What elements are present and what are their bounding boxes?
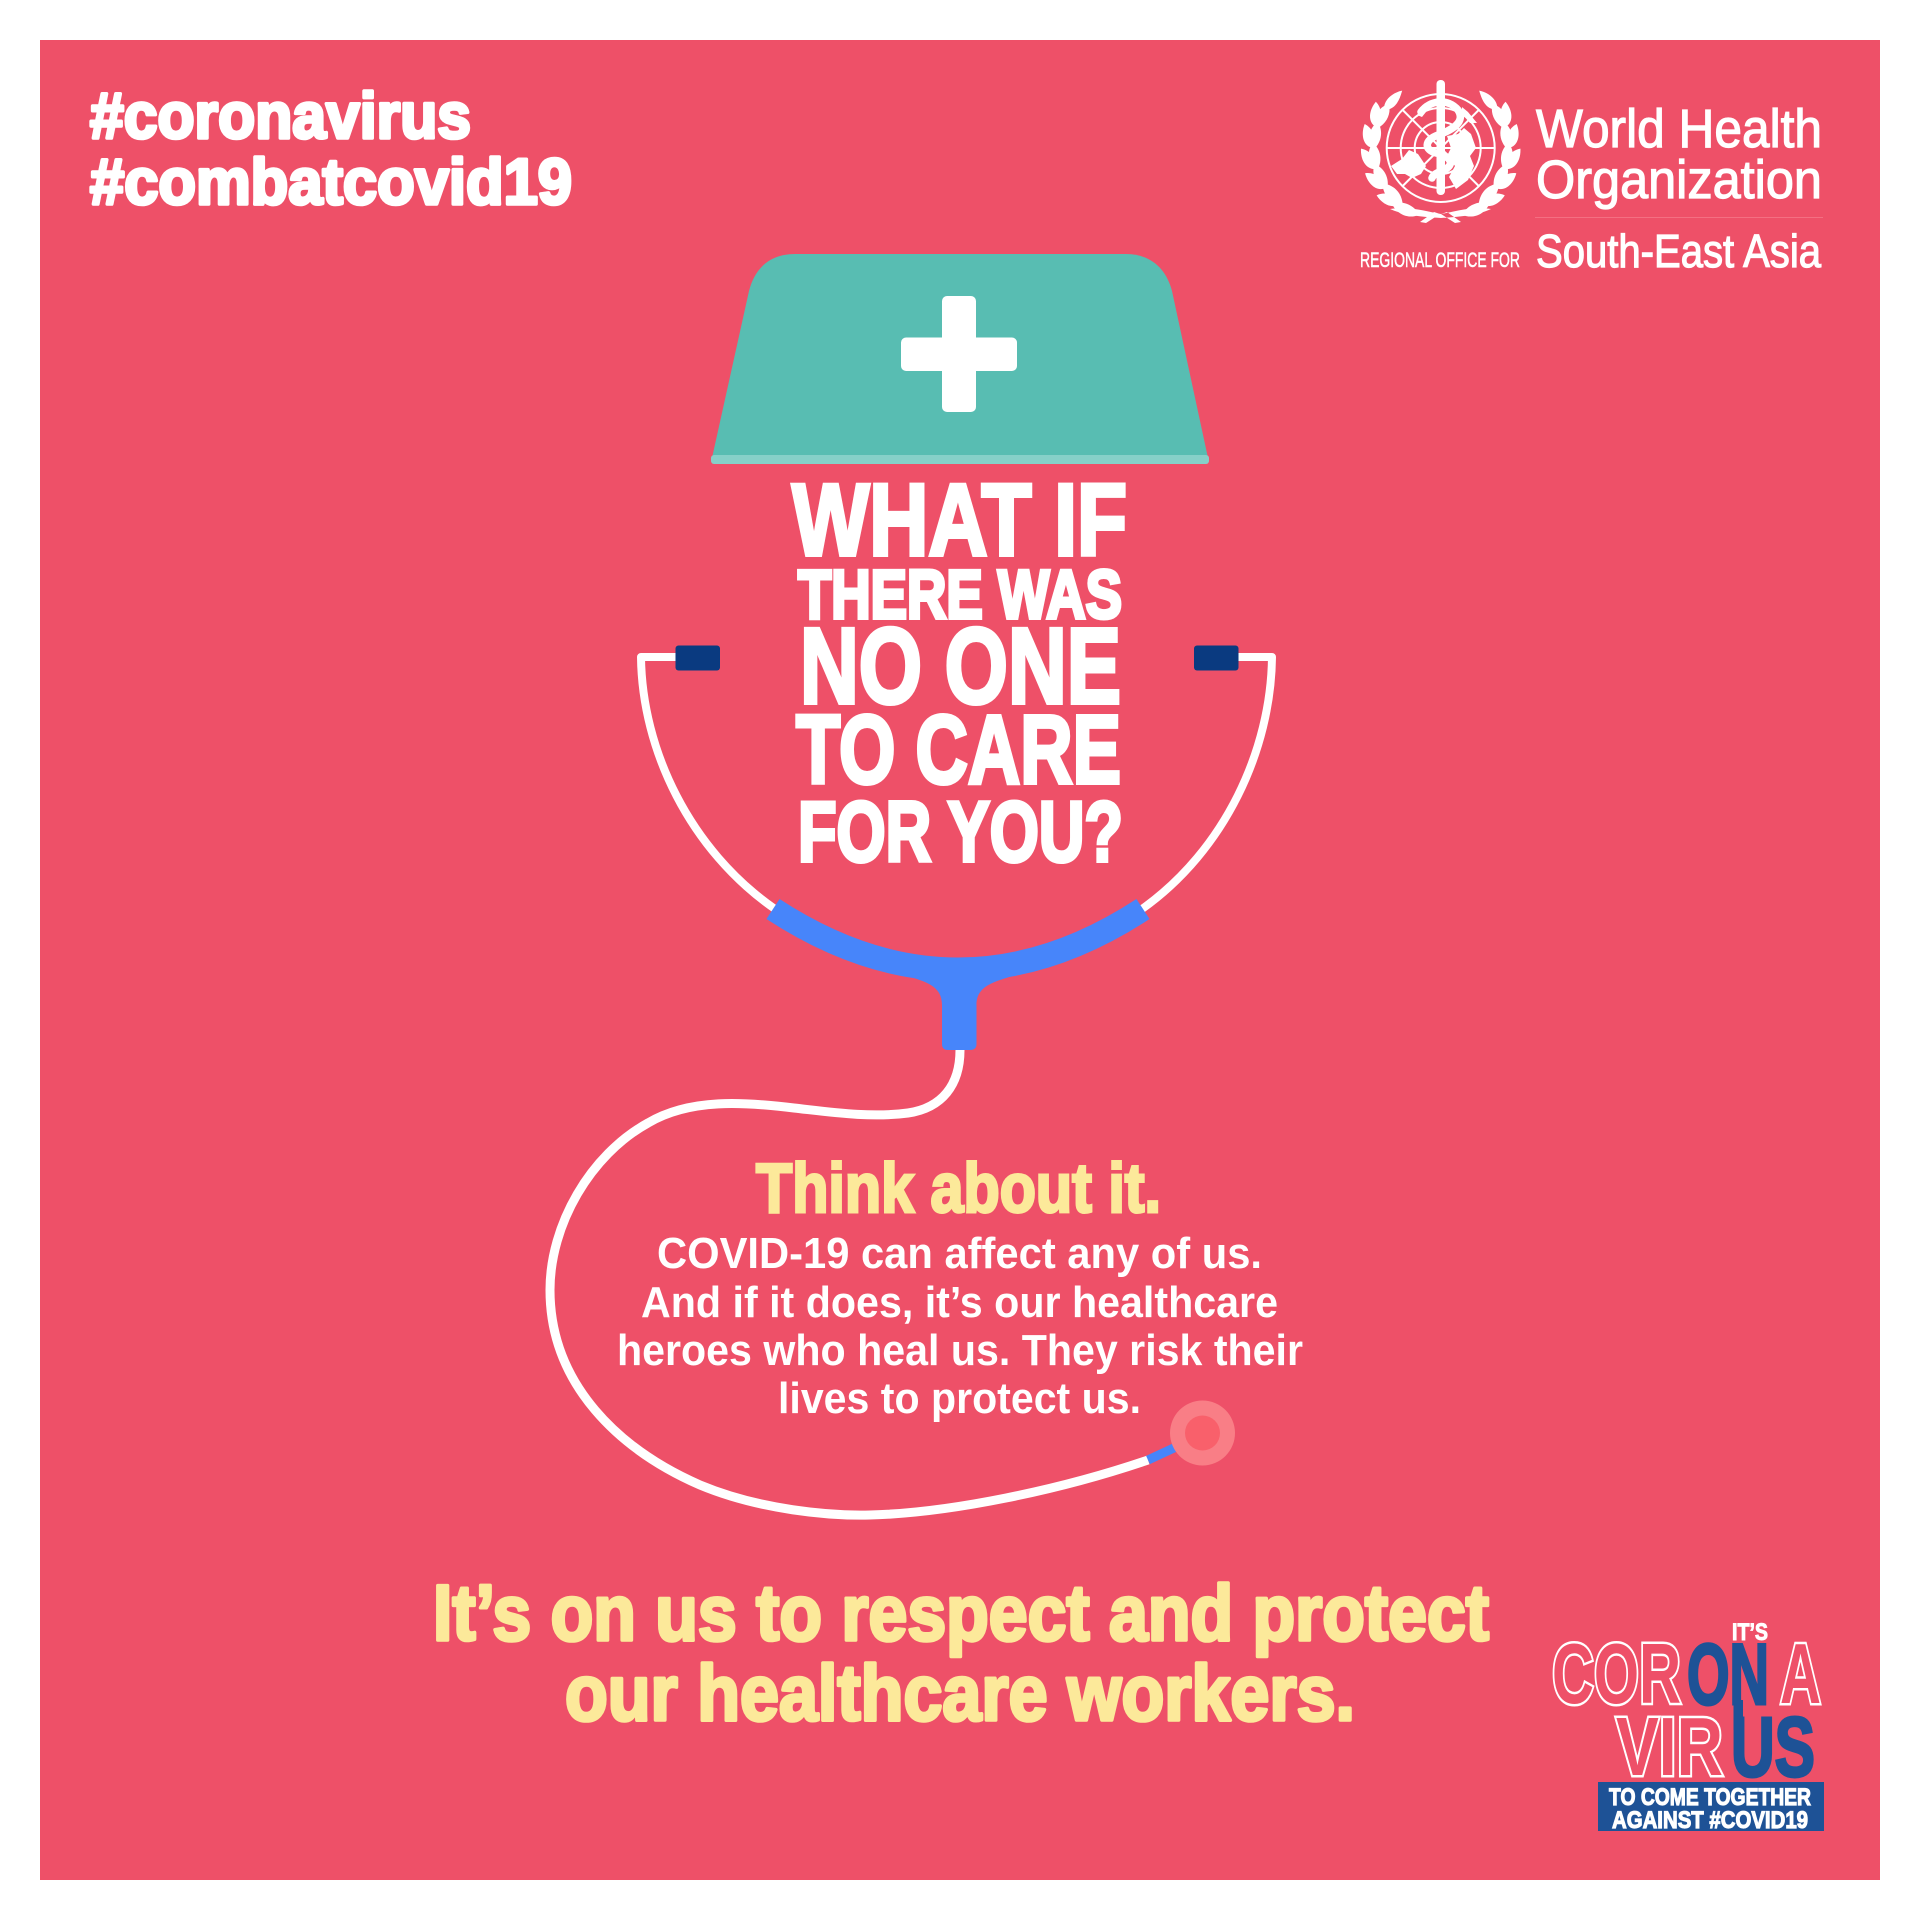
- body text: lives to protect us.: [778, 1375, 1141, 1423]
- snake and staff: [1417, 80, 1460, 195]
- hashtags: [90, 79, 572, 218]
- headline: WHAT IF: [792, 463, 1127, 577]
- body text: And if it does, it’s our healthcare: [641, 1279, 1278, 1327]
- headline: THERE WAS: [798, 556, 1122, 633]
- icon: WHO emblem: [1359, 80, 1522, 223]
- wreath left: [1359, 86, 1421, 220]
- stethoscope: [550, 646, 1272, 1515]
- body text: COVID-19 can affect any of us.: [657, 1230, 1262, 1278]
- call to action: It’s on us to respect and protect: [433, 1568, 1489, 1657]
- hashtags: #coronavirus: [90, 79, 471, 152]
- icon: nurse cap: [711, 254, 1209, 464]
- headline: NO ONE: [800, 605, 1121, 726]
- headline: FOR YOU?: [798, 785, 1123, 880]
- earpieces: [676, 646, 1238, 670]
- outlined letters: VIR: [1616, 1700, 1723, 1793]
- IT'S label: IT’S: [1732, 1619, 1768, 1646]
- body text: [617, 1230, 1303, 1423]
- wreath right: [1460, 86, 1522, 220]
- call to action: our healthcare workers.: [565, 1648, 1355, 1737]
- sub-heading: Think about it.: [756, 1149, 1161, 1227]
- tagline box: TO COME TOGETHER: [1609, 1784, 1811, 1811]
- call to action: [433, 1568, 1489, 1737]
- organization name: Organization: [1536, 150, 1822, 210]
- South-East Asia: South-East Asia: [1536, 225, 1821, 277]
- organization name: World Health: [1536, 99, 1822, 159]
- headline: [792, 463, 1127, 880]
- campaign logo: [1552, 1619, 1824, 1834]
- blue letters: [1687, 1627, 1815, 1794]
- outlined letters: COR: [1552, 1627, 1681, 1722]
- headline: TO CARE: [796, 695, 1121, 804]
- blue letters: ON: [1687, 1627, 1769, 1723]
- blue letters: US: [1731, 1700, 1815, 1794]
- body text: heroes who heal us. They risk their: [617, 1327, 1303, 1375]
- WHO logo: [1359, 80, 1823, 277]
- tagline box: [1598, 1782, 1824, 1834]
- chest piece: [1148, 1400, 1235, 1466]
- outlined letters: [1552, 1627, 1821, 1793]
- blue Y-piece: [773, 909, 1143, 1050]
- tagline box: AGAINST #COVID19: [1612, 1807, 1808, 1834]
- hashtags: #combatcovid19: [90, 145, 572, 218]
- organization name: [1536, 99, 1822, 210]
- outlined letters: A: [1780, 1627, 1821, 1722]
- continents: [1391, 150, 1426, 178]
- stethoscope tubes: [550, 657, 1272, 1515]
- regional office label: REGIONAL OFFICE FOR: [1360, 249, 1520, 272]
- icon: cross: [901, 296, 1017, 412]
- ribbon: [1390, 208, 1491, 223]
